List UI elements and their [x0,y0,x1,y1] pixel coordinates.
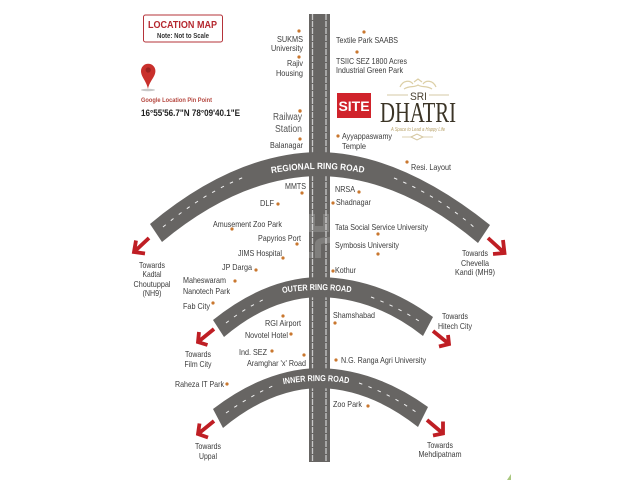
location map title box [144,15,222,42]
label: Balanagar: Balanagar [270,140,303,150]
label: TSIIC SEZ [336,50,407,75]
direction: Hitech City: Towards [442,311,468,321]
direction: Film City: Film City [184,359,212,369]
label: Railway Station [273,109,302,135]
direction: Kadtal Choutuppal: (NH9) [142,288,162,298]
direction: Kadtal Choutuppal: Kadtal [142,269,162,279]
logo: Sri Dhatri: A Space to Lead a Happy Life [390,127,445,133]
direction: Kadtal Choutuppal: Towards [139,260,165,270]
direction: Kadtal Choutuppal: Choutuppal [134,279,171,289]
label: SUKMS University: SUKMS [277,34,303,44]
road: inner ring road [213,368,428,428]
label: Rajiv Housing [276,55,304,78]
label: TSIIC SEZ: TSIIC SEZ 1800 Acres [336,56,407,66]
label: Rajiv Housing: Housing [276,68,303,78]
direction: Uppal: Uppal [199,451,217,461]
direction: Uppal [195,421,221,461]
direction: Chevella Kandi [455,238,504,277]
direction: Chevella Kandi: Towards [462,248,488,258]
direction: Film City [184,329,214,369]
label: Raheza IT Park: Raheza IT Park [175,379,225,389]
direction: Chevella Kandi: Kandi (MH9) [455,267,495,277]
label: Textile Park: Textile Park SAABS [336,35,398,45]
label: SUKMS University: University [271,43,304,53]
label: Maheswaram Nanotech Park: Nanotech Park [183,286,231,296]
label: Kothur: Kothur [335,265,356,275]
direction: Film City: Towards [185,349,211,359]
logo: Sri Dhatri: DHATRI [380,97,456,129]
direction: Mehdipatnam: Mehdipatnam [418,449,462,459]
label: Maheswaram Nanotech Park: Maheswaram [183,275,226,285]
label: Aramghar x Road [247,353,306,368]
coordinates: 16°55'56.7"N 78°09'40.1"E [141,108,240,118]
label: Shamshabad [333,310,375,325]
label: MMTS [285,181,306,195]
label: Tata Social Service University: Tata Social Service University [335,222,429,232]
label: DLF: DLF [260,198,274,208]
direction: Mehdipatnam: Towards [427,440,453,450]
label: Aramghar x Road: Aramghar 'x' Road [247,358,306,368]
label: Shadnagar: Shadnagar [336,197,371,207]
label: Amusement Zoo Park: Amusement Zoo Park [213,219,283,229]
road: regional ring road [150,152,490,243]
road: outer ring road: OUTER RING ROAD [282,284,352,293]
pin point caption: Google Location Pin Point [141,97,213,104]
label: Resi. Layout [405,160,452,172]
location map title box: Note: Not to Scale [157,33,209,40]
label: Ayyappaswamy Temple: Ayyappaswamy [342,131,393,141]
direction: Kadtal Choutuppal [134,238,171,298]
site badge [337,93,371,118]
label: Shamshabad: Shamshabad [333,310,375,320]
location map title box: LOCATION MAP [148,19,217,31]
direction: Uppal: Towards [195,441,221,451]
label: Fab City: Fab City [183,301,211,311]
label: Maheswaram Nanotech Park [183,275,237,296]
label: Symbosis University: Symbosis University [335,240,400,250]
road: inner ring road: INNER RING ROAD [282,375,350,384]
direction: Hitech City [433,311,473,346]
label: SUKMS University [271,29,304,53]
label: MMTS: MMTS [285,181,306,191]
label: NRSA: NRSA [335,184,355,194]
label: Railway Station: Railway [273,112,302,123]
logo: Sri Dhatri: SRI [410,91,427,103]
label: Textile Park [336,30,398,45]
logo: Sri Dhatri [380,79,456,140]
label: Ind. SEZ: Ind. SEZ [239,347,267,357]
label: Resi. Layout: Resi. Layout [411,162,452,172]
road: outer ring road [213,277,433,337]
icon: map pin [141,64,155,91]
label: JP Darga: JP Darga [222,262,252,272]
label: Railway Station: Station [275,124,302,135]
direction: Mehdipatnam [418,420,462,459]
label: JIMS Hospital: JIMS Hospital [238,248,282,258]
label: Rajiv Housing: Rajiv [287,58,304,68]
road: regional ring road: REGIONAL RING ROAD [271,162,364,174]
label: Ayyappaswamy Temple: Temple [342,141,366,151]
direction: Hitech City: Hitech City [438,321,473,331]
label: RGI Airport [265,314,302,328]
label: Zoo Park: Zoo Park [333,399,363,409]
label: N.G. Ranga Agri University: N.G. Ranga Agri University [341,355,427,365]
direction: Chevella Kandi: Chevella [461,258,489,268]
label: Papyrios Port: Papyrios Port [258,233,302,243]
label: Ayyappaswamy Temple [336,131,393,151]
label: Tata Social Service University [335,222,429,236]
site badge: SITE [338,98,370,114]
label: RGI Airport: RGI Airport [265,318,302,328]
label: TSIIC SEZ: Industrial Green Park [336,65,404,75]
main vertical road [309,14,330,462]
label: Symbosis University [335,240,400,256]
label: Novotel Hotel: Novotel Hotel [245,330,288,340]
